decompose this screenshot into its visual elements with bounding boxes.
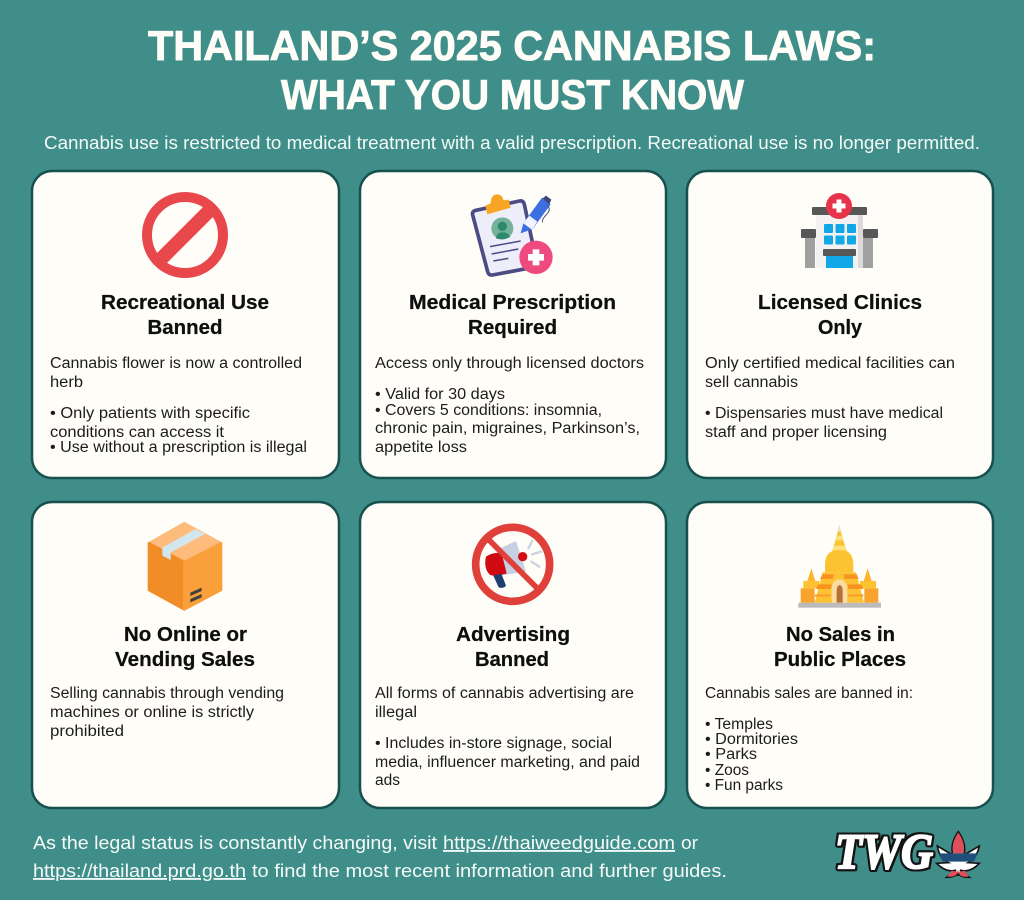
panel: medical prescription required (360, 171, 666, 478)
body text: Selling cannabis through vending (50, 685, 284, 702)
heading: Vending Sales (115, 648, 255, 671)
body text: • Temples (705, 716, 773, 733)
body text (375, 355, 644, 456)
panel: advertising banned (360, 502, 666, 808)
body text (50, 355, 307, 456)
footer note: https://thaiweedguide.com (443, 832, 675, 853)
body text: chronic pain, migraines, Parkinson’s, (375, 420, 640, 437)
body text: • Valid for 30 days (375, 386, 505, 403)
body text: illegal (375, 704, 417, 721)
icon: thai flag leaf (937, 832, 979, 877)
body text: Only certified medical facilities can (705, 355, 955, 372)
footer note: As the legal status is constantly changing, visit (33, 832, 437, 853)
body text: • Dispensaries must have medical (705, 405, 943, 422)
heading: Medical Prescription (409, 291, 616, 314)
body text: All forms of cannabis advertising are (375, 685, 634, 702)
heading: Only (818, 316, 863, 339)
body text: sell cannabis (705, 374, 798, 391)
footer note: to find the most recent information and further guides. (252, 860, 727, 881)
body text: • Includes in-store signage, social (375, 735, 612, 752)
title: WHAT YOU MUST KNOW (281, 71, 744, 118)
body text: appetite loss (375, 439, 467, 456)
heading: No Online or (124, 623, 247, 646)
icon: golden temple (798, 525, 881, 608)
body text: ads (375, 772, 400, 789)
body text: Cannabis sales are banned in: (705, 685, 913, 702)
title (148, 22, 876, 118)
body text: • Zoos (705, 762, 749, 779)
icon: crossed-out megaphone (476, 527, 550, 601)
body text: Access only through licensed doctors (375, 355, 644, 372)
heading (115, 623, 255, 671)
body text: • Fun parks (705, 777, 783, 794)
heading: Banned (148, 316, 222, 339)
body text (705, 355, 955, 441)
icon: prohibition sign (147, 197, 223, 273)
body text: conditions can access it (50, 424, 225, 441)
panel: no sales in public places (687, 502, 993, 808)
heading: Advertising (456, 623, 570, 646)
heading (409, 291, 616, 339)
body text (50, 685, 284, 740)
icon: clipboard prescription (472, 194, 553, 275)
body text (375, 685, 640, 789)
heading: Licensed Clinics (758, 291, 922, 314)
body text: prohibited (50, 723, 124, 740)
panel: no online or vending sales (32, 502, 339, 808)
body text: • Use without a prescription is illegal (50, 439, 307, 456)
heading (101, 291, 269, 339)
title: THAILAND’S 2025 CANNABIS LAWS: (148, 22, 876, 69)
heading (758, 291, 922, 339)
logo: TWG with cannabis leaf: TWG (835, 823, 933, 879)
heading (456, 623, 570, 671)
footer note: https://thailand.prd.go.th (33, 860, 246, 881)
footer note (33, 832, 727, 881)
body text: staff and proper licensing (705, 424, 887, 441)
icon: hospital (801, 193, 878, 268)
heading (774, 623, 906, 671)
body text: herb (50, 374, 83, 391)
heading: Required (468, 316, 557, 339)
body text: • Only patients with specific (50, 405, 250, 422)
subtitle: Cannabis use is restricted to medical treatment with a valid prescription. Recreational use is no longer permitted. (44, 133, 980, 153)
panel: licensed clinics only (687, 171, 993, 478)
heading: Public Places (774, 648, 906, 671)
heading: No Sales in (786, 623, 895, 646)
heading: Recreational Use (101, 291, 269, 314)
body text: • Dormitories (705, 731, 798, 748)
heading: Banned (475, 648, 549, 671)
footer note: or (681, 832, 698, 853)
body text: • Covers 5 conditions: insomnia, (375, 402, 602, 419)
body text (705, 685, 913, 794)
panel: recreational use banned (32, 171, 339, 478)
icon: cardboard box (149, 523, 221, 609)
body text: machines or online is strictly (50, 704, 254, 721)
body text: media, influencer marketing, and paid (375, 754, 640, 771)
body text: • Parks (705, 746, 757, 763)
body text: Cannabis flower is now a controlled (50, 355, 302, 372)
